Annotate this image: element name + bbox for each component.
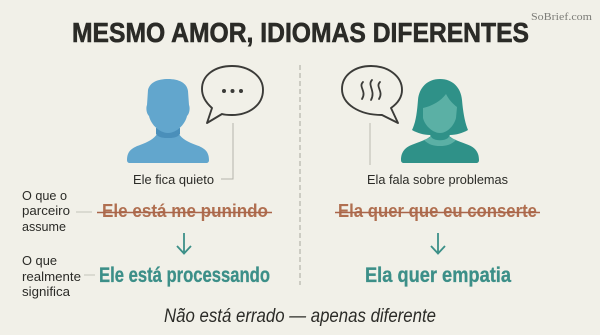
text: left meaning: Ele está processando [99,264,270,287]
icon: woman silhouette [401,79,479,163]
struck text: right assumption: Ela quer que eu conserte [338,201,537,221]
row label: assumes [22,188,70,234]
arrow: right [431,233,445,254]
caption: right behaviour: Ela fala sobre problemas [367,172,508,187]
row label: assumes: parceiro [22,203,70,218]
icon: speech bubble with dots [202,66,263,123]
icon: speech bubble with steam [342,66,402,123]
text: right meaning: Ela quer empatia [365,264,511,287]
row label: meaning: O que [22,253,57,268]
footer message: Não está errado — apenas diferente [164,306,436,327]
watermark: SoBrief.com [531,11,592,23]
icon: man silhouette [127,79,209,163]
arrow: left [177,233,191,254]
row label: meaning: realmente [22,269,81,284]
title: MESMO AMOR, IDIOMAS DIFERENTES [72,17,529,48]
struck text: left assumption: Ele está me punindo [102,201,268,221]
connector: bubble to caption [221,123,233,179]
row label: assumes: assume [22,219,66,234]
caption: left behaviour: Ele fica quieto [133,172,214,187]
row label: meaning: significa [22,284,71,299]
row label: meaning [22,253,81,299]
row label: assumes: O que o [22,188,67,203]
